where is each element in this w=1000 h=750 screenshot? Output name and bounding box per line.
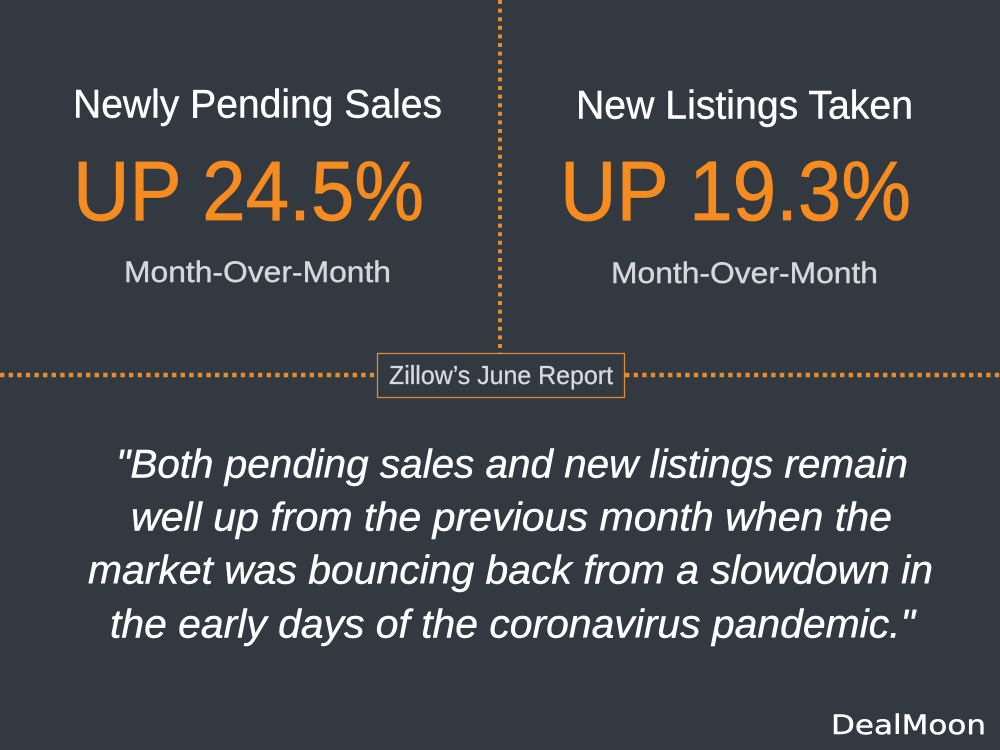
logo: DealMoon: DealMoon xyxy=(831,710,986,741)
stat: up 24.5%: UP 24.5% xyxy=(73,144,424,238)
panel: newly pending sales xyxy=(73,82,442,289)
panel: new listings taken xyxy=(560,84,913,290)
heading: newly pending sales: Newly Pending Sales xyxy=(73,82,442,126)
quote block: the early days of the coronavirus pandemic." xyxy=(110,602,917,646)
quote block: well up from the previous month when the xyxy=(131,496,892,540)
quote block: "Both pending sales and new listings remain xyxy=(116,442,908,486)
label box: Zillow's June Report: Zillow’s June Report xyxy=(389,360,614,390)
heading: new listings taken: New Listings Taken xyxy=(576,84,913,128)
label box: Zillow's June Report xyxy=(378,354,624,398)
quote block: market was bouncing back from a slowdown in xyxy=(88,548,933,592)
stat: up 19.3%: UP 19.3% xyxy=(560,144,911,238)
quote block xyxy=(88,442,933,646)
caption: month-over-month right: Month-Over-Month xyxy=(611,257,878,290)
caption: month-over-month left: Month-Over-Month xyxy=(124,256,391,289)
